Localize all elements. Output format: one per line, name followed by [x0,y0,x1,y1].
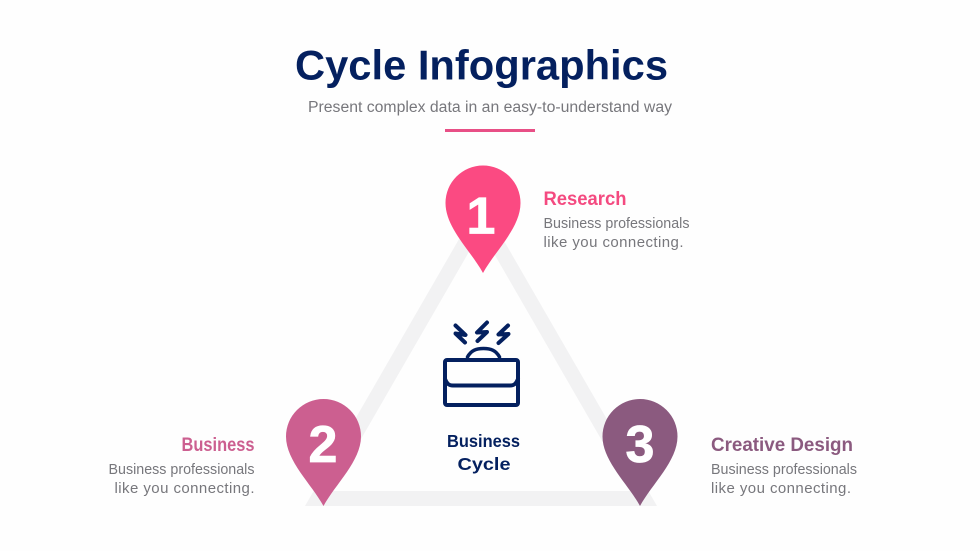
pin 3: 3 [626,416,654,474]
label 3: creative design: Business professionals [711,461,857,478]
title: Cycle Infographics [295,42,668,88]
label 1: research: Business professionals [544,215,690,232]
label 2: business [108,435,254,497]
pin 1: 1 [467,188,495,246]
label 1: research [544,189,690,251]
label 1: research: Research [544,189,626,210]
label 1: research: like you connecting. [544,234,684,251]
pin 2 [286,399,361,506]
cycle triangle [305,201,657,506]
label 2: business: Business professionals [108,461,254,478]
center label: Business [447,431,520,451]
icon: briefcase with lightning bolts [445,322,518,405]
subtitle: Present complex data in an easy-to-understand way [308,99,672,116]
label 3: creative design: Creative Design [711,435,853,456]
label 2: business: Business [182,435,254,456]
center label: Cycle [458,454,511,474]
title accent rule [445,129,535,132]
pin 1 [446,166,520,273]
pin 3 [602,399,678,506]
center label [447,431,520,474]
pin 2: 2 [309,416,337,474]
label 3: creative design: like you connecting. [711,480,851,497]
label 3: creative design [711,435,857,497]
label 2: business: like you connecting. [114,480,254,497]
